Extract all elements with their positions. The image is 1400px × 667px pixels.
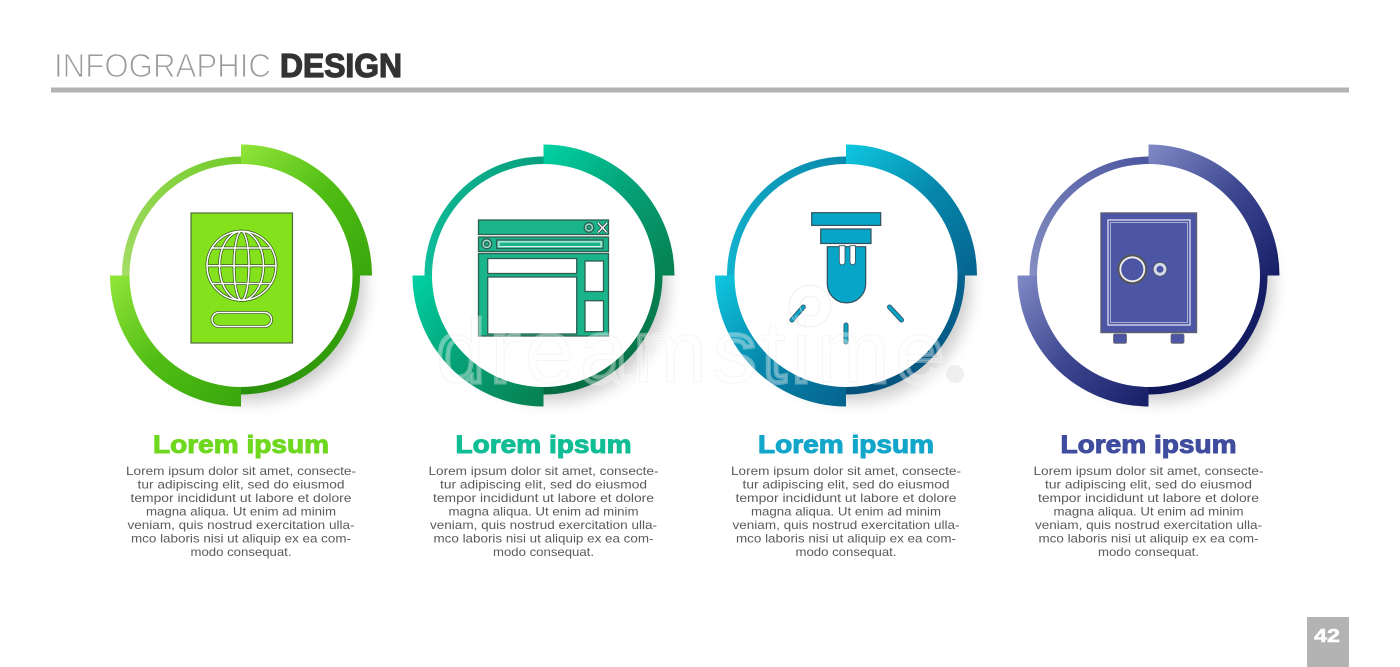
text block: modo consequat.	[493, 545, 594, 559]
text block: mco laboris nisi ut aliquip ex ea com-	[1038, 532, 1258, 546]
ring: blue	[715, 144, 977, 406]
text block: magna aliqua. Ut enim ad minim	[751, 504, 941, 518]
icon: passport	[191, 213, 292, 343]
watermark: dreamstime	[436, 302, 944, 401]
text block: veniam, quis nostrud exercitation ulla-	[430, 518, 657, 532]
text block: Lorem ipsum dolor sit amet, consecte-	[428, 464, 658, 478]
text block: modo consequat.	[190, 545, 292, 559]
text block: tempor incididunt ut labore et dolore	[1038, 491, 1259, 505]
panel: sprinkler step	[715, 144, 977, 559]
panel: safe step	[1018, 144, 1280, 559]
text block: veniam, quis nostrud exercitation ulla-	[732, 518, 960, 532]
text block: modo consequat.	[1098, 545, 1199, 559]
icon: safe	[1101, 213, 1196, 343]
text block: tur adipiscing elit, sed do eiusmod	[440, 478, 647, 492]
heading: Lorem ipsum	[153, 431, 329, 459]
text block: mco laboris nisi ut aliquip ex ea com-	[131, 532, 351, 546]
text block: Lorem ipsum dolor sit amet, consecte-	[1034, 464, 1264, 478]
ring: indigo	[1018, 144, 1280, 406]
text block: Lorem ipsum dolor sit amet, consecte-	[126, 464, 356, 478]
heading: Lorem ipsum	[456, 431, 632, 459]
text block: tur adipiscing elit, sed do eiusmod	[1045, 478, 1252, 492]
text block	[428, 464, 658, 559]
ring: green	[110, 144, 372, 406]
text block: veniam, quis nostrud exercitation ulla-	[128, 518, 354, 532]
text block	[731, 464, 961, 559]
text block	[1034, 464, 1264, 559]
text block: tempor incididunt ut labore et dolore	[433, 491, 654, 505]
text block: mco laboris nisi ut aliquip ex ea com-	[434, 532, 654, 546]
title: INFOGRAPHIC	[54, 47, 271, 84]
panel: passport step	[110, 144, 372, 559]
panel: browser window step	[412, 144, 674, 559]
title: DESIGN	[280, 47, 402, 84]
text block	[126, 464, 356, 559]
watermark: dreamstime	[436, 302, 944, 401]
text block: tur adipiscing elit, sed do eiusmod	[742, 478, 950, 492]
icon: browser window	[478, 220, 608, 336]
title	[54, 47, 402, 84]
heading: Lorem ipsum	[1060, 431, 1236, 459]
text block: mco laboris nisi ut aliquip ex ea com-	[736, 532, 956, 546]
text block: tur adipiscing elit, sed do eiusmod	[138, 478, 344, 492]
text block: veniam, quis nostrud exercitation ulla-	[1035, 518, 1262, 532]
heading: Lorem ipsum	[758, 431, 934, 459]
page number badge	[1307, 617, 1349, 667]
page number badge: 42	[1314, 626, 1340, 646]
text block: magna aliqua. Ut enim ad minim	[1054, 504, 1244, 518]
text block: Lorem ipsum dolor sit amet, consecte-	[731, 464, 961, 478]
icon: sprinkler	[792, 213, 902, 342]
ring: teal	[412, 144, 674, 406]
text block: tempor incididunt ut labore et dolore	[130, 491, 352, 505]
text block: tempor incididunt ut labore et dolore	[736, 491, 957, 505]
text block: magna aliqua. Ut enim ad minim	[146, 504, 336, 518]
text block: magna aliqua. Ut enim ad minim	[448, 504, 639, 518]
text block: modo consequat.	[796, 545, 896, 559]
